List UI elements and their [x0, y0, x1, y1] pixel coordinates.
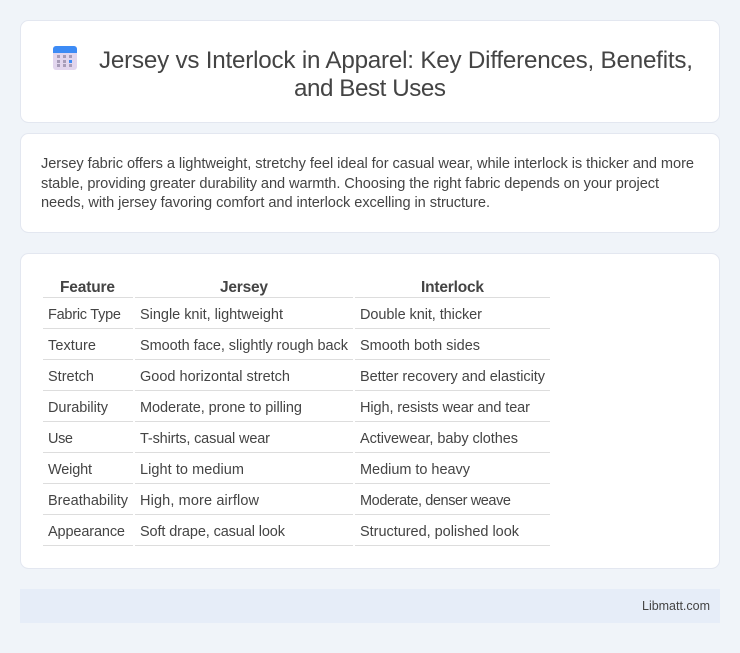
table header: Interlock — [421, 279, 484, 296]
row: Texture: Smooth both sides — [360, 338, 480, 354]
text block: intro paragraph: stable, providing greater durability and warmth. Choosing the right fabric depends on your project — [41, 176, 659, 192]
row: Durability — [43, 400, 550, 422]
text block: intro paragraph — [41, 156, 694, 211]
row: Durability: Moderate, prone to pilling — [140, 400, 302, 416]
row: Stretch — [43, 369, 550, 391]
row: Breathability — [43, 493, 550, 515]
row: Durability: Durability — [48, 400, 109, 416]
panel: header — [20, 20, 720, 122]
panel: introduction — [20, 134, 720, 232]
row: Durability: High, resists wear and tear — [360, 400, 530, 416]
title — [99, 47, 693, 102]
footer — [20, 589, 720, 623]
title: Jersey vs Interlock in Apparel: Key Differences, Benefits, — [99, 47, 693, 74]
row: Appearance: Structured, polished look — [360, 524, 520, 540]
row: Weight — [43, 462, 550, 484]
row: Breathability: Moderate, denser weave — [360, 493, 511, 509]
row: Texture: Texture — [48, 338, 96, 354]
row: Texture: Smooth face, slightly rough back — [140, 338, 349, 354]
row: Texture — [43, 338, 550, 360]
title: and Best Uses — [294, 75, 446, 102]
row: Use — [43, 431, 550, 453]
row: Stretch: Good horizontal stretch — [140, 369, 290, 385]
row: Fabric Type — [43, 307, 550, 329]
row: Use: Activewear, baby clothes — [360, 431, 518, 447]
row: Appearance — [43, 524, 550, 546]
row: Stretch: Better recovery and elasticity — [360, 369, 546, 385]
row: Use: T-shirts, casual wear — [140, 431, 270, 447]
table header — [43, 279, 550, 298]
row: Breathability: Breathability — [48, 493, 129, 509]
panel: comparison table — [20, 254, 720, 568]
icon: calendar — [53, 46, 77, 70]
row: Weight: Weight — [48, 462, 92, 478]
footer: Libmatt.com — [642, 599, 710, 613]
text block: intro paragraph: Jersey fabric offers a lightweight, stretchy feel ideal for casual wear, while interlock is thicker and more — [41, 156, 694, 172]
table header: Jersey — [220, 279, 268, 296]
row: Appearance: Appearance — [48, 524, 125, 540]
row: Fabric Type: Fabric Type — [48, 307, 121, 323]
row: Use: Use — [48, 431, 73, 447]
table header: Feature — [60, 279, 115, 296]
row: Weight: Light to medium — [140, 462, 244, 478]
row: Breathability: High, more airflow — [140, 493, 260, 509]
text block: intro paragraph: needs, with jersey favoring comfort and interlock excelling in structure. — [41, 195, 490, 211]
row: Fabric Type: Double knit, thicker — [360, 307, 482, 323]
row: Stretch: Stretch — [48, 369, 94, 385]
row: Weight: Medium to heavy — [360, 462, 471, 478]
row: Appearance: Soft drape, casual look — [140, 524, 286, 540]
row: Fabric Type: Single knit, lightweight — [140, 307, 283, 323]
